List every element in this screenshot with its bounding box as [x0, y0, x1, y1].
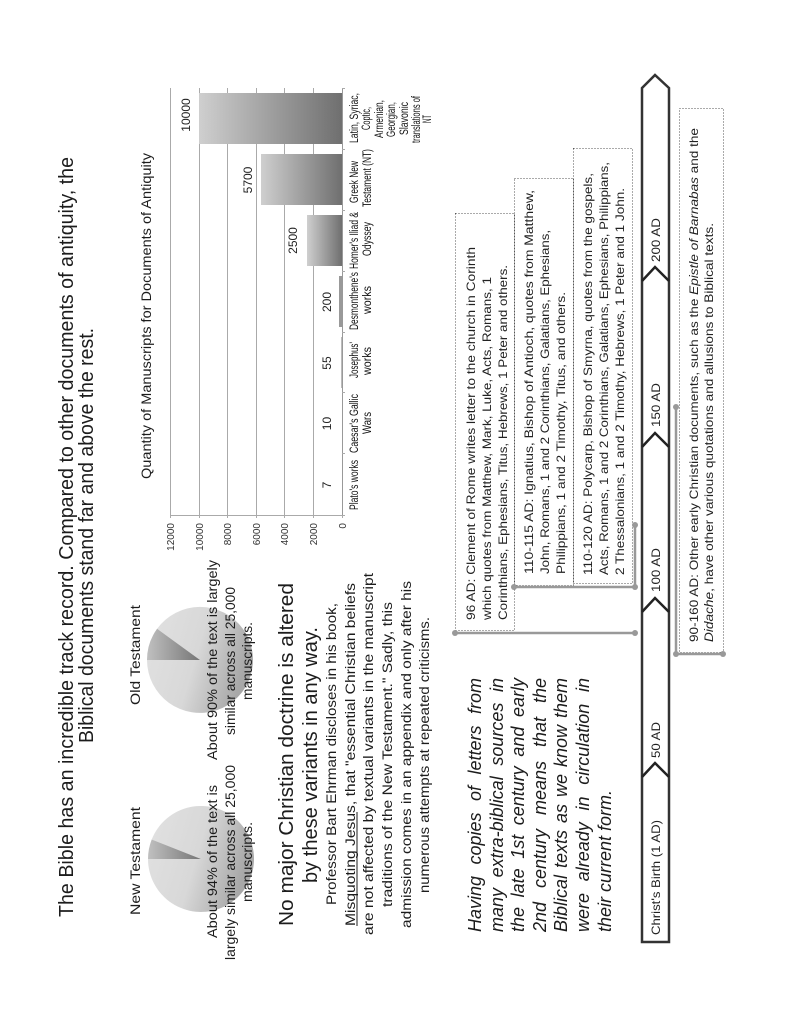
text block: italic paragraph: their current form. — [595, 790, 615, 932]
text block: italic paragraph: the late 1st century and early — [508, 678, 528, 932]
timeline arrow — [642, 75, 669, 942]
text block: Bart Ehrman — [324, 573, 432, 935]
y axis labels: 12000 — [166, 523, 177, 551]
callout: 110-120 AD Polycarp: 2 Thessalonians, 1 and 2 Timothy, Hebrews, 1 Peter and 1 John. — [613, 188, 627, 575]
callout: 96 AD Clement of Rome — [456, 214, 514, 630]
bar chart: manuscripts for documents of antiquity — [138, 88, 434, 551]
caption: New Testament: largely similar across all 25,000 — [223, 765, 238, 960]
category labels: NT — [422, 115, 434, 123]
title — [55, 157, 98, 917]
category labels: Wars — [362, 412, 374, 434]
caption: Old Testament: similar across all 25,000 — [223, 587, 238, 735]
category labels: Latin, Syriac, — [349, 93, 361, 143]
category labels: Josephus' — [349, 342, 361, 378]
value labels: 200 — [320, 292, 334, 312]
text block: Bart Ehrman: Misquoting Jesus, that "essential Christian beliefs — [343, 583, 358, 926]
text block: italic paragraph: Having copies of letters from — [465, 678, 485, 932]
text block: italic paragraph: 2nd century means that the — [530, 678, 550, 932]
timeline labels: 200 AD — [649, 218, 663, 262]
value labels: 2500 — [286, 227, 300, 254]
category labels: works — [362, 286, 374, 315]
y axis labels: 4000 — [280, 523, 291, 545]
bars — [199, 93, 342, 388]
category labels: Coptic, — [361, 107, 373, 130]
category labels: works — [362, 347, 374, 376]
y axis labels: 0 — [338, 523, 349, 529]
callout: 90-160 AD other documents: Didache, have other various quotations and allusions to Biblical texts. — [702, 223, 716, 642]
heading: Old Testament: Old Testament — [127, 605, 143, 705]
caption: New Testament: About 94% of the text is — [205, 785, 220, 938]
caption: Old Testament: About 90% of the text is largely — [205, 560, 220, 760]
text block: italic paragraph: many extra-biblical sources in — [487, 678, 507, 932]
caption: Old Testament: manuscripts. — [240, 622, 255, 700]
text block: Bart Ehrman: numerous attempts at repeated criticisms. — [417, 617, 432, 893]
category labels: Desmonthene's — [349, 272, 361, 330]
text block: italic paragraph — [465, 677, 615, 932]
pie chart: Old Testament 90% — [147, 607, 253, 713]
caption: Old Testament — [205, 560, 255, 760]
heading: New Testament: New Testament — [127, 807, 143, 915]
chart title: Quantity of Manuscripts for Documents of Antiquity — [138, 153, 154, 479]
text block: Bart Ehrman: admission comes in an appendix and only after his — [399, 581, 414, 928]
heading: no major doctrine altered: by these variants in any way. — [299, 627, 322, 883]
value labels: 10000 — [179, 98, 193, 132]
timeline labels: 100 AD — [649, 548, 663, 592]
value labels: 55 — [320, 356, 334, 370]
title: The Bible has an incredible track record. Compared to other documents of antiquity, the — [55, 157, 78, 917]
value labels: 5700 — [241, 166, 255, 193]
value labels — [179, 98, 334, 488]
callout: 110-120 AD Polycarp — [574, 148, 632, 584]
callout: 110-120 AD Polycarp: 110-120 AD: Polycarp, Bishop of Smyrna, quotes from the gospels, — [581, 173, 595, 575]
category labels: Plato's works — [349, 460, 361, 510]
category labels: Homer's Iliad & — [349, 212, 361, 269]
category labels: translations of — [411, 95, 423, 143]
timeline labels: Christ's Birth (1 AD) — [649, 820, 663, 935]
callout: 110-120 AD Polycarp: Acts, Romans, 1 and 2 Corinthians, Galatians, Ephesians, Philippians, — [597, 162, 611, 575]
text block: Bart Ehrman: traditions of the New Testament." Sadly, this — [380, 602, 395, 907]
callout: 90-160 AD other documents: 90-160 AD: Other early Christian documents, such as the Epistle of Barnabas and the — [687, 128, 701, 642]
caption: New Testament — [205, 765, 255, 960]
pie chart: New Testament 94% — [148, 806, 254, 912]
callout: 110-115 AD Ignatius: 110-115 AD: Ignatius, Bishop of Antioch, quotes from Matthew, — [522, 190, 536, 574]
panel: New Testament pie — [127, 765, 255, 960]
category labels: Testament (NT) — [362, 149, 374, 207]
timeline labels — [649, 218, 663, 935]
category labels: Armenian, — [374, 100, 386, 138]
caption: New Testament: manuscripts. — [240, 822, 255, 902]
timeline labels: 150 AD — [649, 383, 663, 427]
category labels: Greek New — [349, 161, 361, 203]
callout: 96 AD Clement of Rome: 96 AD: Clement of Rome writes letter to the church in Corinth — [464, 247, 478, 620]
callout: 110-115 AD Ignatius: John, Romans, 1 and 2 Corinthians, Galatians, Ephesians, — [538, 230, 552, 574]
text block: italic paragraph: Biblical texts as we know them — [551, 678, 571, 932]
text block: Bart Ehrman: are not affected by textual variants in the manuscript — [361, 573, 376, 935]
callout: 110-115 AD Ignatius: Philippians, 1 and 2 Timothy, Titus, and others. — [554, 292, 568, 574]
callout: 96 AD Clement of Rome: Corinthians, Ephesians, Titus, Hebrews, 1 Peter and others. — [496, 265, 510, 620]
category labels: Caesar's Gallic — [349, 394, 361, 453]
callout: 90-160 AD other documents — [680, 108, 724, 652]
value labels: 10 — [320, 417, 334, 430]
text block: Bart Ehrman: Professor Bart Ehrman discloses in his book, — [324, 603, 339, 905]
y axis labels: 8000 — [223, 523, 234, 545]
category labels: Slavonic — [399, 102, 411, 135]
heading: no major doctrine altered — [275, 583, 322, 926]
callout: 96 AD Clement of Rome: which quotes from Matthew, Mark, Luke, Acts, Romans, 1 — [480, 277, 494, 621]
value labels: 7 — [320, 481, 334, 488]
category labels — [349, 93, 434, 510]
y axis labels: 2000 — [309, 523, 320, 545]
y axis labels — [166, 523, 349, 551]
category labels: Georgian, — [386, 102, 398, 137]
connectors: callouts to timeline — [452, 404, 726, 657]
timeline labels: 50 AD — [649, 722, 663, 758]
y axis labels: 10000 — [195, 523, 206, 551]
category labels: Odyssey — [362, 222, 374, 256]
title: Biblical documents stand far and above the rest. — [75, 328, 98, 743]
text block: italic paragraph: were already in circulation in — [573, 678, 593, 932]
panel: Old Testament pie — [127, 560, 255, 760]
callout: 110-115 AD Ignatius — [514, 178, 574, 586]
heading: no major doctrine altered: No major Christian doctrine is altered — [275, 583, 298, 926]
y axis labels: 6000 — [252, 523, 263, 545]
